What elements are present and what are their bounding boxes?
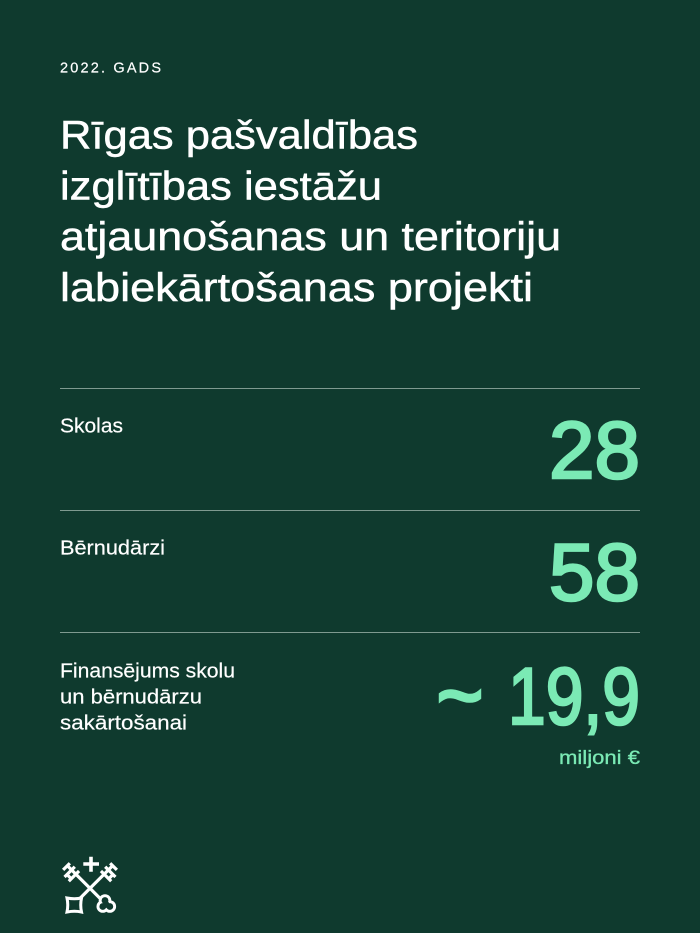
label: funding <box>60 660 235 734</box>
label: schools: Skolas <box>60 415 123 438</box>
title: izglītības iestāžu <box>60 164 382 208</box>
value: kindergartens count: 58 <box>549 528 640 618</box>
label: funding: un bērnudārzu <box>60 686 202 708</box>
icon: crossed keys logo <box>60 857 120 913</box>
label: funding: Finansējums skolu <box>60 660 235 682</box>
cross <box>83 857 99 872</box>
title: labiekārtošanas projekti <box>60 266 533 310</box>
value: schools count: 28 <box>549 406 640 496</box>
key handle clover <box>96 894 116 913</box>
title: atjaunošanas un teritoriju <box>60 215 561 259</box>
label: kindergartens: Bērnudārzi <box>60 537 165 560</box>
key left <box>60 862 103 905</box>
unit: million euro: miljoni € <box>559 748 640 769</box>
value: funding amount <box>437 651 640 742</box>
row: kindergartens <box>60 528 640 618</box>
value: funding amount: ~ <box>437 651 483 741</box>
year label: 2022. GADS <box>60 61 161 77</box>
label: funding: sakārtošanai <box>60 712 187 734</box>
title: Rīgas pašvaldības <box>60 114 418 158</box>
key right <box>77 862 120 905</box>
title <box>60 114 561 310</box>
key handle square <box>67 898 82 912</box>
row: funding <box>60 651 640 769</box>
value: funding amount: 19,9 <box>508 652 640 742</box>
row: schools <box>60 406 640 496</box>
